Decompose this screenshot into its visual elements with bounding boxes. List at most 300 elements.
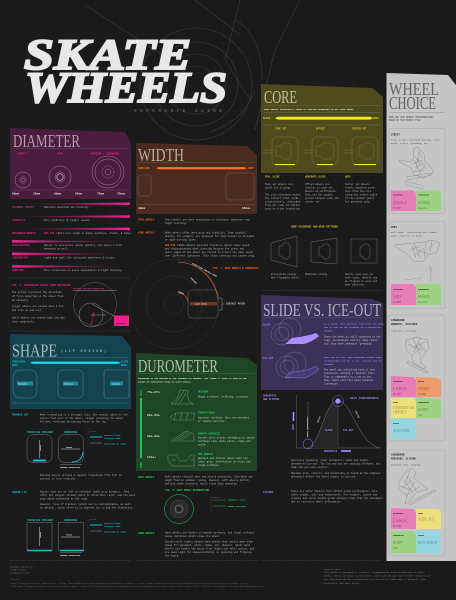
text: hard wheels: are used light for maneuverability in spinning and flipping <box>165 551 252 554</box>
hardness rows: Smoother surfaces like new pavement <box>198 416 250 420</box>
forgiving to grip scale: GRIP <box>12 364 18 367</box>
core wear patterns: Non-flippable wheel. <box>271 276 300 280</box>
diagram: rounded lip: TRAVELING STRAIGHT <box>27 431 54 434</box>
figure 1: suspension effect: Small wheels are pushed back and may <box>12 316 65 320</box>
sources <box>10 578 264 588</box>
chart: durometer and sliding: DUROMETER <box>263 394 277 398</box>
panel: durometer <box>136 353 257 471</box>
heading: wheel choice: WHEEL <box>389 79 439 99</box>
text: core columns: ideal for sliding. <box>265 186 291 190</box>
hardness rows: SMOOTH SURFACES <box>198 432 220 436</box>
diameter attribute rows: More stability at higher speeds. <box>44 219 91 222</box>
diagram: square lip: FORCE <box>39 531 42 538</box>
swatch: shape square <box>391 418 416 439</box>
text: core columns: Offset wheels are <box>305 183 330 186</box>
card: longboard freeride: Downhill runs, sliding. <box>391 464 421 466</box>
forgiving to grip scale: FORGIVING <box>12 360 26 364</box>
swatch: diameter mid: DIAMETER <box>393 288 403 291</box>
text: core columns: GRIP <box>345 176 351 178</box>
diagram: rounded lip <box>27 429 127 469</box>
swatch: core center or offset: CENTER OR <box>393 406 414 410</box>
text: factors: There are other factors that affect slide performance: core <box>291 490 378 493</box>
core wear patterns: wear patterns. <box>345 284 365 286</box>
text: core columns: similar to side set <box>305 186 333 190</box>
swatch: durometer hard <box>416 284 441 305</box>
text: hard wheels: ideal for pavement, parks, ramps, etc. However, small hard <box>165 544 250 547</box>
diameter attribute rows: FLYWHEEL EFFECT <box>12 206 34 209</box>
swatch: durometer hard: 95a-101a <box>418 206 428 210</box>
text: soft wheels <box>138 476 253 486</box>
slide illustration: SLIDE <box>263 324 271 326</box>
ice-out text: This is comparable to a car on ice. <box>324 376 372 378</box>
text: hard wheels: wheels can handle the abuse from ledges and metal grinds, and <box>165 548 255 550</box>
text: thin and wide wheels: and responsiveness when steering because the inner and <box>165 248 245 250</box>
swatch: core side set: CORE <box>418 512 424 515</box>
ice-out text <box>324 356 382 386</box>
figure 2: wide wheels and cornering <box>129 259 259 349</box>
figure 2: wide wheels and cornering: OUTER EDGE TRAVELS MORE <box>192 262 218 278</box>
diagram: rounded lip: DIRECTION OF FORCE <box>104 442 127 446</box>
wheel size scale <box>12 192 126 196</box>
text: core columns: FULL SLIDE <box>265 176 280 178</box>
text: hard wheels: HARD WHEELS <box>138 532 155 535</box>
lip shape icons: BEVELED <box>64 382 74 386</box>
title: SKATE <box>24 32 191 79</box>
wheel choice intro <box>389 116 434 122</box>
text: core columns: MODERATE SLIDE <box>305 176 326 178</box>
diameter attribute rows: Easier to accelerate (push) quickly, but doesn't hold <box>44 244 122 247</box>
hardness rows: pools. <box>198 444 207 446</box>
slide text: Since the wheel is still connected to the <box>324 336 381 338</box>
figure 1: suspension effect: FIG. 1: SUSPENSION EFFECT FROM OBSTACLES <box>12 284 71 287</box>
credits: Jacob O'Neal <box>10 568 26 572</box>
lip shape icons <box>13 370 129 398</box>
forgiving to grip scale: SLIDE <box>121 360 129 364</box>
special note: may find contradictory information. In the end it comes down to personal rider <box>324 578 427 581</box>
width values: 30mm <box>138 207 145 210</box>
swatch: diameter small: 50-53mm <box>393 206 402 210</box>
text: durometer and sliding notes <box>291 459 381 478</box>
panel: slide vs ice-out <box>261 295 385 390</box>
ice-out text: CONTROL. <box>324 363 335 366</box>
panel: diameter <box>10 128 131 199</box>
width scale <box>138 167 254 170</box>
width scale: GRIP <box>248 167 254 170</box>
text: rounded summary <box>40 474 122 480</box>
text: core columns: Side set wheels are <box>265 183 293 186</box>
figure 1: suspension effect: The arrows represent the direction <box>12 291 62 294</box>
swatch: durometer soft: <85a <box>418 414 423 416</box>
text: core columns: grip-to-slide transition. <box>265 208 302 210</box>
hardness scale bar: SOFT <box>140 390 143 396</box>
swatch: durometer soft: DUROMETER <box>418 401 430 404</box>
diagram: rounded lip: CONTACT PATCH <box>104 434 121 437</box>
text: core columns: for greatest grip. <box>345 200 371 204</box>
special note <box>324 568 431 585</box>
text: factors: due to excessive wheel deformation. <box>291 500 342 504</box>
ice-out text: WHEN YOU ICE OUT, HARD URETHANE EITHER TEARS <box>324 356 382 359</box>
heading note: lip design: (LIP DESIGN) <box>61 349 106 354</box>
swatch: diameter large <box>391 376 416 397</box>
special note: This guide is intended as a general recommendation and introduction to skate <box>324 571 424 574</box>
figure 1: suspension effect: stop completely. <box>12 320 35 324</box>
hardness rows: Rough surfaces, drifting, cruising. <box>198 396 249 398</box>
text: rounded lip: ROUNDED LIP <box>12 414 29 416</box>
swatch: durometer soft: <85a <box>393 546 398 550</box>
text: core columns: along the entire width <box>345 194 378 196</box>
core cross sections <box>263 137 378 165</box>
figure 1: suspension effect: Larger wheels are pushed back a bit, <box>12 305 65 308</box>
diagram: square lip: TRACTION AREA <box>104 525 121 528</box>
core type labels: OFFSET <box>316 128 325 130</box>
diagram: square lip: CORNER DIRECTION <box>60 554 81 557</box>
slide text: IN A SLIDE, SOFT URETHANE FLOWS FROM THE WHEEL <box>324 322 385 326</box>
chart: durometer and sliding: BEST PERFORMANCE <box>350 397 379 400</box>
panel: shape <box>10 334 131 409</box>
wheel size scale: 60mm <box>54 192 61 196</box>
wheel size icons <box>15 156 124 188</box>
swatch: width wide: 45-65mm <box>418 392 427 396</box>
diagram: square lip: CONTACT PATCH <box>104 522 121 525</box>
core wear patterns: Mostly even wear on <box>345 273 373 276</box>
chart: durometer and sliding: SLIDE <box>325 429 333 432</box>
text: core columns: from the side for better <box>265 204 301 207</box>
core wear patterns <box>271 226 378 286</box>
figure 3: soft wheel deformation: ORIGINAL SHAPE <box>228 499 246 502</box>
diagram: square lip <box>27 518 127 557</box>
width values <box>138 207 251 210</box>
swatch: diameter large: 65-75mm <box>393 392 402 396</box>
diagram: square lip: TRAVELING STRAIGHT <box>27 519 54 522</box>
figure 2: wide wheels and cornering: FARTHER <box>189 277 198 285</box>
text: thin and wide wheels: SEE FIG 2: <box>165 244 180 247</box>
width values: 65mm+ <box>242 207 251 210</box>
core type labels: SIDE SET <box>275 128 287 130</box>
heading: durometer: DUROMETER <box>138 356 218 376</box>
figure 1: suspension effect: SMALL WHEEL <box>90 310 95 325</box>
wheel choice intro: HERE ARE SOME GENERAL RECOMMENDATIONS <box>389 116 434 118</box>
text: square lip: offer the largest contact patch to shred more rails, and the best <box>40 494 136 497</box>
skater sketch: freeride <box>399 468 436 505</box>
ice-out text: connection, causing a "sketchy" feel. <box>324 372 375 375</box>
text: core columns: evenly disperse pres- <box>345 186 376 190</box>
text: hard wheels: Street-style riders choose hard wheels that mostly make them <box>165 540 253 544</box>
card: longboard freeride: LONGBOARD: <box>391 454 406 456</box>
chart: durometer and sliding: DUROMETER <box>324 450 338 453</box>
figure 3: soft wheel deformation: K E Y <box>213 496 220 499</box>
text: thin and wide wheels: over different distances. This slows steering and causes drag. <box>165 254 256 258</box>
chart: durometer and sliding: SKETCHY <box>354 410 361 420</box>
swatch: shape square: SQUARE <box>393 428 410 433</box>
core type labels: CENTER SET <box>352 128 367 130</box>
core wear patterns: both sides. Wheels can <box>345 276 378 280</box>
ice-out text: The wheel can unbond and bind or lose <box>324 368 376 372</box>
swatch: diameter mid <box>391 284 416 305</box>
hardness rows: surfaces like skate parks, ramps and <box>198 440 251 443</box>
background wheel line art <box>85 0 300 140</box>
heading: width: WIDTH <box>138 145 184 165</box>
text: square lip: as abrupt), since there is no tapered lip to aid the transition. <box>40 506 134 510</box>
swatch: core center or offset <box>391 398 416 418</box>
diameter category labels: • VERT • <box>54 152 66 156</box>
hardness rows: or smooth concrete. <box>198 420 226 423</box>
swatch: core side set: SIDE SET <box>418 516 436 522</box>
diameter attribute rows: LIGHTWEIGHT <box>12 256 29 260</box>
swatch: diameter mid: 54-59mm <box>393 300 402 304</box>
card: street: STREET <box>391 134 400 136</box>
diagram: rounded lip: CORNER DIRECTION <box>60 466 81 469</box>
sources: http://blog.boardsports.com/archive / http://www.daddyskate.com/longboard-guide/wheels/1-wheels / http://www.blackmarket-skateshop.com/wp/wheels/choosing-wheels-for-your-deck / http <box>10 582 248 585</box>
swatch: diameter large: LARGE <box>393 518 407 523</box>
hardness rows: OUTDOOR <box>198 390 209 394</box>
text: core columns: center set. <box>305 200 321 204</box>
text: square lip: However, loss of traction (which can be unpredictable, as well <box>40 503 131 506</box>
text: thin and wide wheels: This wheels are more responsive to technical maneuvers and <box>165 218 250 222</box>
special note: wheels. Rules are meant to be broken, and as you do your own further research you <box>324 574 431 578</box>
card: vert: VERT <box>391 226 397 229</box>
text: soft wheels: Soft wheels rebound over and absorb obstacles, like when you <box>165 476 253 478</box>
text: factors <box>263 490 384 504</box>
card: street: parks, stairs, grinding, etc. <box>391 142 429 145</box>
diagram: rounded lip: FORCE <box>39 444 42 451</box>
figure 1: suspension effect: OBSTACLE <box>116 322 126 325</box>
text: core columns: of the contact patch <box>345 197 375 200</box>
swatch: diameter large: DIAMETER <box>393 512 403 515</box>
text: core columns: wheels in performance. <box>305 190 337 193</box>
text: hard wheels: cause vibration which slows the wheel. <box>165 535 221 538</box>
hardness rows: 101a+ <box>147 456 156 459</box>
swatch: durometer soft: DUROMETER <box>393 534 405 537</box>
hardness rows: rough surfaces. <box>198 464 220 467</box>
durometer intro <box>138 377 247 384</box>
swatch: core center or offset: OFFSET <box>393 410 407 414</box>
text: rounded lip: entire flat part of the wheel, though (assuming the wheel <box>40 417 124 420</box>
text: durometer and sliding notes: durometer before the wheel begins to ice-out. <box>291 476 357 478</box>
durometer intro: DUROMETER IS THE MEASURE OF THE HARDNESS OF RUBBERS. THE "SHORE A" SCALE IS USED IN THE <box>138 377 247 380</box>
swatch: shape rounded: SHAPE <box>418 534 425 537</box>
heading: shape: SHAPE <box>12 340 57 360</box>
card: longboard freeride <box>389 450 445 556</box>
text: durometer and sliding notes: Maximum grip, control, and durability is found at the highest <box>291 472 381 475</box>
text: thin and wide wheels: or wide-curving lines. <box>165 238 197 242</box>
card: longboard downhill: Stability, cruising. <box>391 330 417 332</box>
hardness rows: 88a–95a <box>147 414 160 417</box>
lip shape icons: SQUARE <box>112 382 121 386</box>
diagram: rounded lip: CORNERING <box>64 431 78 434</box>
card: vert: Half pipes, constructed with smooth <box>391 231 438 234</box>
chart: durometer and sliding: WORST PERFORMANCE <box>306 416 309 437</box>
card: longboard freeride: FREERIDE, SLIDING <box>391 458 416 460</box>
chart: durometer and sliding: GRIP <box>292 424 295 430</box>
text: rounded lip: follows, ensuring increasing force on the lip. <box>40 420 107 424</box>
swatch: width wide <box>416 377 441 397</box>
slide text: call this wheel behavior "greasing". <box>324 342 374 346</box>
wheel size scale: 75mm+ <box>117 192 126 196</box>
core scale: SLIDE <box>263 117 271 120</box>
swatch: diameter large <box>391 508 416 529</box>
hardness rows: TRANSITIONAL <box>198 412 216 414</box>
card: vert: wood, concrete, or metal. <box>391 234 424 238</box>
text: square lip: Square lips are at "all or nothing" (with grip dynamic). They <box>40 490 130 494</box>
swatch: diameter mid: MID <box>393 294 401 299</box>
slide text: AND IS LEFT ON THE PAVEMENT IN A CONTROLLED <box>324 326 381 329</box>
core type labels <box>275 128 367 130</box>
lip shape icons: ROUNDED <box>18 382 28 386</box>
text: factors: sizes weight, and road temperature. For example, riders can <box>291 494 378 496</box>
swatch: durometer hard: HARD <box>418 294 430 299</box>
hardness scale bar: HARD <box>140 462 143 468</box>
text: thin and wide wheels: Wide wheels generate friction, which slows speed <box>179 244 250 247</box>
hardness rows: 96a–99a <box>147 435 160 438</box>
skater sketch: street <box>399 147 434 189</box>
diameter category labels <box>14 152 123 156</box>
text: core columns: progressively, unbounded <box>265 200 301 204</box>
core wear patterns: Moderate coning. <box>305 273 328 276</box>
figure 3: soft wheel deformation <box>164 489 246 524</box>
special note: preference like most things. <box>324 582 361 585</box>
swatch: core side set <box>416 509 441 529</box>
text: core columns: Center set wheels <box>345 183 370 186</box>
swatch: durometer soft <box>416 398 441 418</box>
wheel size scale: 70mm <box>97 192 104 196</box>
diameter attribute rows: Light and small for intricate maneuvers & tricks. <box>44 256 116 260</box>
figure 1: suspension effect: but also up and over. <box>12 309 43 312</box>
card: longboard downhill <box>389 315 445 441</box>
text: hard wheels <box>138 532 255 558</box>
swatch: diameter large: LARGE <box>393 386 407 391</box>
text: soft wheels: SOFT WHEELS <box>138 476 155 479</box>
diameter attribute rows: momentum as well. <box>44 248 69 250</box>
ice-out text: UNPREDICTABLY OR NOT AT ALL, CAUSING LOSS OF <box>324 360 382 362</box>
text: thin and wide wheels: THIN WHEELS <box>138 218 155 222</box>
core wear patterns: CORE PLACEMENT AND WEAR PATTERNS <box>291 226 338 228</box>
swatch: width wide: WIDTH <box>418 380 425 383</box>
hardness scale bar <box>140 390 143 468</box>
text: soft wheels: might find in outdoor riding. However, soft wheels deform <box>165 479 249 482</box>
swatch: durometer soft <box>391 531 416 553</box>
heading: core: CORE <box>264 87 297 107</box>
diameter attribute rows: ACCELERATION <box>12 244 30 247</box>
swatch: diameter small: SMALL <box>393 200 408 205</box>
ice-out illustration: ICE-OUT <box>263 357 274 360</box>
hardness rows: least grip. Ineffective on slick and <box>198 460 251 464</box>
diagram: square lip: FORCE <box>66 534 73 536</box>
skater sketch: downhill <box>406 337 429 373</box>
swatch: durometer hard: DUROMETER <box>418 194 430 196</box>
diameter attribute rows: Roll over rough or bumpy surfaces, cracks, & bumps. <box>58 232 133 235</box>
text: thin and wide wheels: outer edges of the wheel are forced to travel the same speed <box>165 251 253 254</box>
diagram: square lip: DIRECTION OF FORCE <box>104 530 127 534</box>
text: square lip: grip while connected to the road. <box>40 498 88 500</box>
swatch: width wide: WIDE <box>418 386 429 391</box>
credits: jacobsneal.com <box>10 572 29 574</box>
slide text: MANNER. <box>324 330 333 332</box>
text: rounded lip: When transiting to a straight line, the contact patch is the <box>40 414 128 416</box>
text: factors: FACTORS <box>263 491 274 494</box>
diagram: square lip: K E Y <box>90 518 97 521</box>
swatch: diameter large: 65-75mm <box>393 524 402 528</box>
figure 2: wide wheels and cornering: INNER <box>178 290 185 296</box>
hardness rows: PRO WHEELS <box>198 453 213 456</box>
chart: durometer and sliding: GRIPPY <box>316 415 322 423</box>
text: hard wheels: Hard wheels are faster on smooth surfaces, but rough surfaces <box>165 532 255 534</box>
durometer intro: RANGES OF DUROMETERS FOUND IN SKATE WHEELS: <box>138 380 192 384</box>
swatch: diameter small <box>391 190 416 211</box>
figure 2: wide wheels and cornering: FIG. 2: WIDE WHEELS & CORNERING <box>213 267 259 270</box>
special note: Special note: <box>324 568 341 571</box>
credits <box>10 566 34 574</box>
text: core columns: ground between side and <box>305 197 339 200</box>
diagram: rounded lip: TRACTION AREA <box>104 437 121 440</box>
wheel size scale: 65mm <box>75 192 82 196</box>
core wear patterns: be flipped to even out <box>345 280 378 283</box>
slide text: road, you maintain control. Some riders <box>324 339 378 342</box>
figure 1: suspension effect: FORWARD ROLLING DIRECTION <box>73 287 105 290</box>
width scale: HANDLING <box>138 167 150 170</box>
text: rounded summary: partial in less traction. <box>40 478 77 480</box>
chart: durometer and sliding <box>263 394 381 453</box>
diameter attribute rows: Maintain momentum and coasting. <box>44 206 89 209</box>
hardness rows: Street-style tricks shredding on smooth <box>198 436 256 440</box>
text: soft wheels: deflect under pressure, which slows down momentum. <box>165 482 238 486</box>
sources: http://www.tahoeplanetskate.com/1-basic-wheels-page / http://lovelesspirtoplanlove.blogspot.com/2017/10/about-skate-parts-about-core-space.html / and the true members of thintoblackboarding.com <box>10 585 264 588</box>
figure 2: wide wheels and cornering: CONTACT PATCH <box>226 303 246 306</box>
text: core columns: The core placement makes <box>265 194 301 196</box>
skater sketch: vert <box>395 240 440 281</box>
text: square lip: SQUARE LIP <box>12 491 27 494</box>
swatch: durometer hard: 95a-101a <box>418 300 428 304</box>
heading: diameter: DIAMETER <box>13 131 80 151</box>
swatch: durometer hard: DUROMETER <box>418 288 430 291</box>
diameter attribute rows <box>12 202 133 272</box>
heading: wheel choice: CHOICE <box>389 93 436 113</box>
forgiving to grip scale: GRIP <box>121 364 127 367</box>
ice-out text: "greasing". <box>324 382 339 386</box>
card: longboard downhill: DOWNHILL, DISTANCE <box>391 323 418 326</box>
panel: core <box>261 84 383 173</box>
diameter category labels: • CRUISING / LONGBOARD • <box>87 152 123 156</box>
diameter attribute rows: HANDLING <box>12 269 24 272</box>
text: thin and wide wheels: tight steering. <box>165 222 187 225</box>
hardness rows: Hardest and fastest wheel with the <box>198 457 248 460</box>
text: factors: produce and shred smooth-grind skating lines that the durometer <box>291 497 384 500</box>
text: rounded summary: Rounded wheels provide a rapport transition from full to <box>40 474 122 477</box>
chart: durometer and sliding: AND SLIDING <box>263 398 280 401</box>
figure 2: wide wheels and cornering: SAME SPEED <box>195 303 208 306</box>
core scale <box>263 117 379 120</box>
title <box>24 32 227 112</box>
diagram: square lip: CORNERING <box>64 519 78 522</box>
diameter attribute rows: STABILITY <box>12 219 26 222</box>
figure 1: suspension effect: of force imparted on the wheel from <box>12 295 64 298</box>
card: vert <box>389 222 445 308</box>
panel: wheel choice <box>386 73 456 561</box>
swatch: diameter large: DIAMETER <box>393 380 403 383</box>
diagram: rounded lip: K E Y <box>90 430 97 433</box>
title: WHEELS <box>25 65 227 112</box>
diameter attribute rows: ROUGHNESS/DEBRIS <box>12 232 36 235</box>
text: durometer and sliding notes: high and you lose control. <box>291 466 329 469</box>
panel: width <box>136 143 257 214</box>
text: hard wheels: the board. <box>165 554 180 558</box>
card: street: Grip, tricks, flatland skating, ramps, <box>391 138 441 142</box>
swatch: durometer hard: HARD <box>418 200 430 205</box>
text: square lip <box>12 490 136 510</box>
text: thin and wide wheels: wheels, for example, are designed for high speeds in straight <box>165 235 255 238</box>
hardness rows <box>147 390 256 467</box>
figure 3: soft wheel deformation: UNDER PRESSURE <box>228 505 246 508</box>
swatch: shape square: SHAPE <box>393 422 400 425</box>
